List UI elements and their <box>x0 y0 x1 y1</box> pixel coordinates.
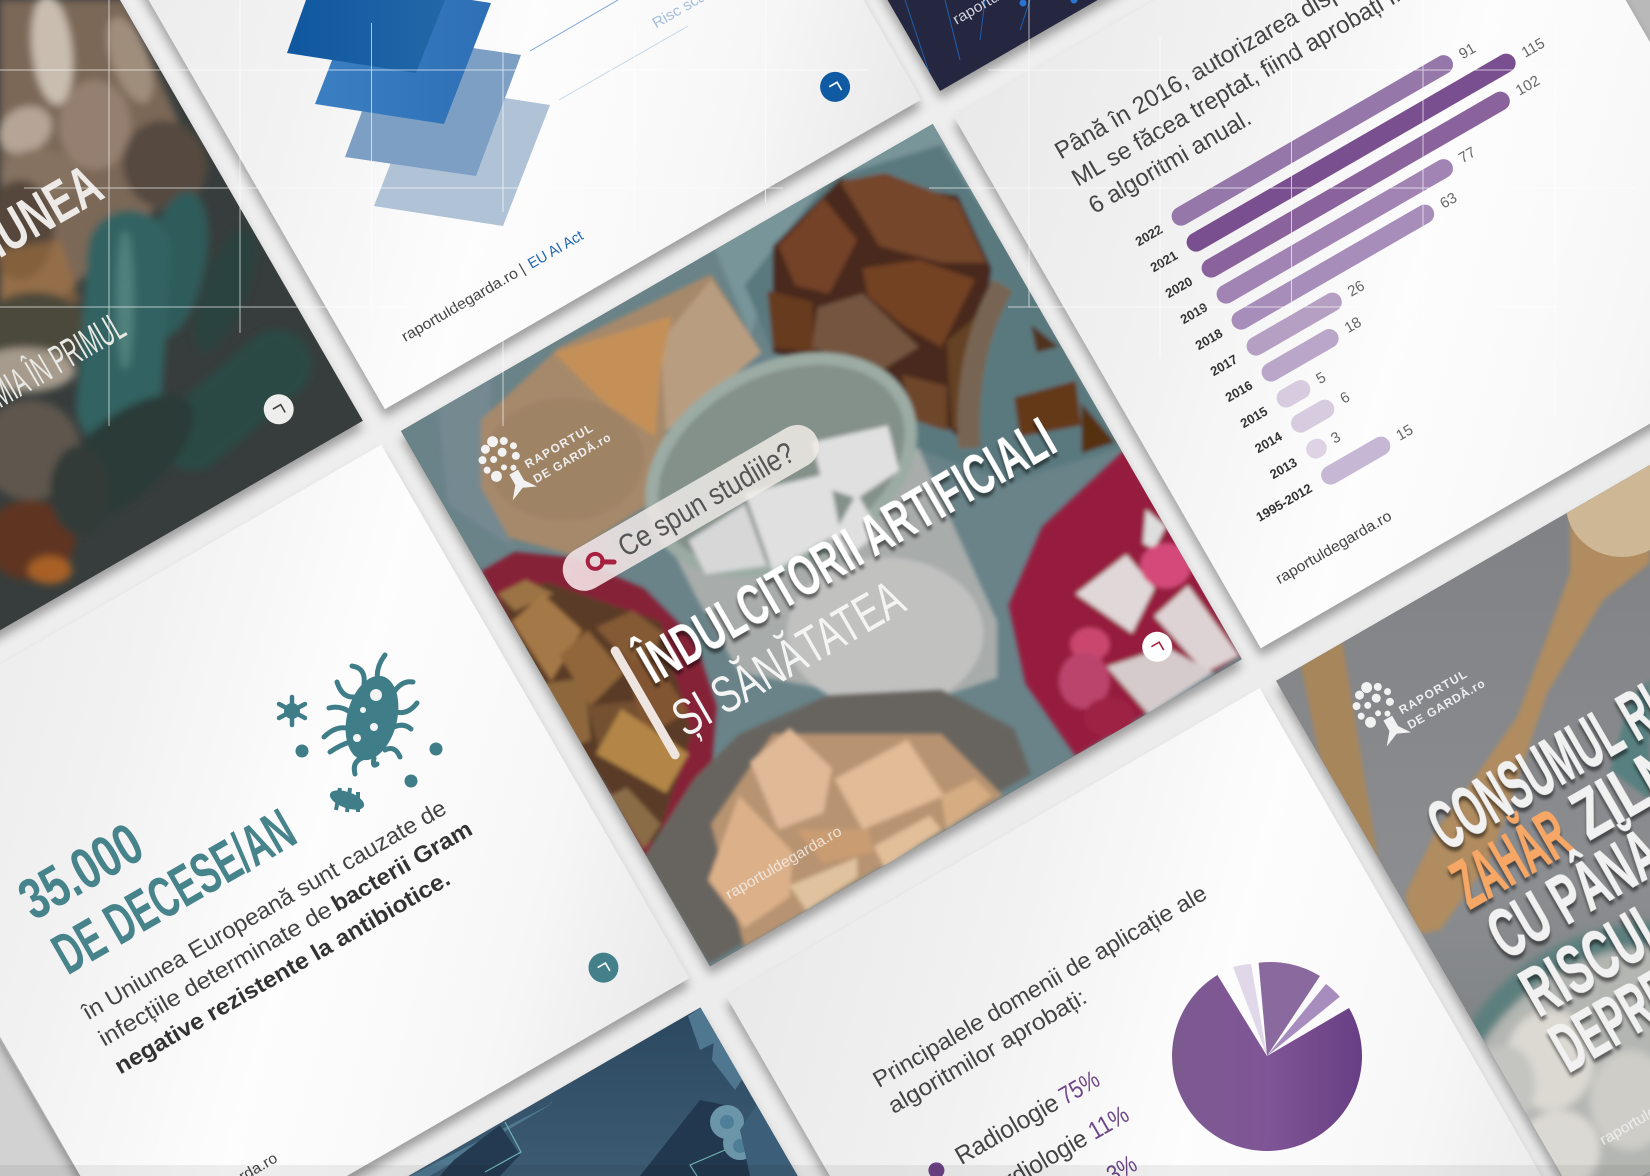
card: circuit photo <box>408 1008 800 1176</box>
cover title: ÎNDULCITORII ARTIFICIALI <box>626 405 1066 697</box>
left spoon handle <box>1300 642 1380 860</box>
pie legend: 75% <box>1054 1065 1104 1110</box>
card: bacteria stat <box>0 445 689 1176</box>
bar: 2015: 5 <box>1313 369 1329 388</box>
stat description: infecțiile determinate de <box>94 896 336 1051</box>
card: central sweeteners cover <box>398 124 1246 978</box>
stat heading <box>8 741 306 988</box>
teal bowl upper rim <box>1610 680 1650 800</box>
footer: blue card: EU AI Act <box>525 227 587 273</box>
card: navy top right <box>876 0 1124 102</box>
bar: 2019: 2019 <box>1178 300 1210 327</box>
sand jar and orange spoon <box>715 124 980 333</box>
stat description: negative rezistente la antibiotice. <box>110 865 454 1079</box>
bar: 2020: 2020 <box>1163 274 1195 301</box>
arrow button <box>583 947 624 988</box>
bar: 1995-2012: 15 <box>1393 421 1416 444</box>
chart intro text: 6 algoritmi anual. <box>1084 105 1256 219</box>
bar: 1995-2012 <box>1253 421 1416 525</box>
bar: 2022: 2022 <box>1133 222 1165 249</box>
bar: 2019 <box>1177 144 1479 328</box>
card: spoon photo <box>1272 465 1650 1176</box>
card: chart of approvals <box>954 0 1650 648</box>
pie legend: Radiologie <box>950 1089 1064 1170</box>
right red bowl and marshmallows <box>1009 448 1241 757</box>
bar: 2016 <box>1222 314 1365 406</box>
bar: 2018: 2018 <box>1193 326 1225 353</box>
bar: 2013: 3 <box>1328 429 1344 447</box>
bar: 2018 <box>1192 189 1460 354</box>
footer: blue card: raportuldegarda.ro <box>399 265 521 346</box>
bar: 2013: 2013 <box>1267 455 1300 482</box>
pie legend: 11% <box>1084 1100 1134 1145</box>
bar: 2022 <box>1132 40 1479 250</box>
bar: 2017: 26 <box>1345 277 1368 300</box>
leader lines <box>530 0 688 100</box>
stat heading: DE DECESE/AN <box>42 797 306 987</box>
icon: bacteria <box>279 655 442 814</box>
crop mark grid <box>0 0 1636 426</box>
pie legend <box>922 1061 1157 1176</box>
search pill <box>562 424 819 591</box>
bar: 2020: 102 <box>1513 72 1543 99</box>
logo: DE GARDĂ.ro <box>531 430 613 486</box>
footer: blue card <box>399 227 587 346</box>
bar: 2019: 77 <box>1456 144 1479 167</box>
vertical accent bar <box>609 645 681 761</box>
wooden spoon <box>1405 440 1650 935</box>
logo <box>478 426 610 500</box>
bar: 2015: 2015 <box>1238 403 1270 431</box>
arrow button <box>264 394 294 424</box>
centre glass jar <box>661 448 997 706</box>
pie intro text: Principalele domenii de aplicație ale <box>868 880 1211 1093</box>
bar: 2014: 2014 <box>1252 428 1285 456</box>
logo: spoon card: DE GARDĂ.ro <box>1405 676 1487 732</box>
footer: blue card: | <box>516 261 528 278</box>
bar: 2020 <box>1162 72 1543 302</box>
arrow button <box>1142 632 1172 662</box>
card: dark pills photo <box>0 0 366 646</box>
spoon card headline <box>1428 682 1650 1078</box>
bar: 2017: 2017 <box>1208 352 1240 379</box>
stacked blue squares <box>287 0 688 226</box>
cover subtitle: ȘI SĂNĂTATEA <box>663 569 914 748</box>
search pill: Ce spun studiile? <box>612 436 800 564</box>
teal bowl <box>1470 919 1650 1176</box>
bar: 2016: 18 <box>1342 314 1365 337</box>
bottom jar with peach cubes <box>644 689 1031 964</box>
bar: 2022: 91 <box>1456 40 1479 63</box>
stat description: bacterii Gram <box>327 815 476 917</box>
horizontal bar chart <box>1103 9 1650 525</box>
bar: 2015 <box>1237 369 1329 432</box>
bar: 1995-2012: 1995-2012 <box>1253 481 1315 525</box>
stat description <box>76 788 492 1080</box>
brown sugar jar <box>745 145 1121 482</box>
bar: 2013 <box>1267 429 1344 483</box>
footer: raportuldegarda.ro <box>723 823 845 903</box>
logo: spoon card: RAPORTUL <box>1396 667 1469 717</box>
card: pie chart <box>726 688 1570 1176</box>
chart footer: raportuldegarda.ro <box>1273 508 1395 588</box>
bar: 2021: 115 <box>1519 35 1548 61</box>
stat heading: 35.000 <box>8 811 154 932</box>
bar: 2021: 2021 <box>1148 248 1180 275</box>
bar: 2014 <box>1252 389 1353 457</box>
bar: 2016: 2016 <box>1223 377 1255 405</box>
cover overlays <box>478 416 1172 899</box>
bar: 2021 <box>1147 35 1548 276</box>
card: EU AI Act blue squares <box>73 0 921 409</box>
stat description: în Uniunea Europeană sunt cauzate de <box>76 794 451 1025</box>
bar: 2018: 63 <box>1437 189 1460 212</box>
bottom shade band <box>0 1165 1650 1176</box>
pie chart <box>1172 962 1362 1151</box>
bar: 2014: 6 <box>1337 389 1353 407</box>
pie intro text: algoritmilor aprobați: <box>883 984 1091 1119</box>
arrow button <box>815 66 856 107</box>
corner shade bottom left <box>0 1040 80 1176</box>
logo: RAPORTUL <box>522 421 595 471</box>
logo: spoon card <box>1352 672 1484 746</box>
dark card text <box>0 168 294 424</box>
bar: 2017 <box>1207 277 1368 380</box>
corner shade top right <box>1600 0 1650 90</box>
left red bowl <box>481 552 717 858</box>
